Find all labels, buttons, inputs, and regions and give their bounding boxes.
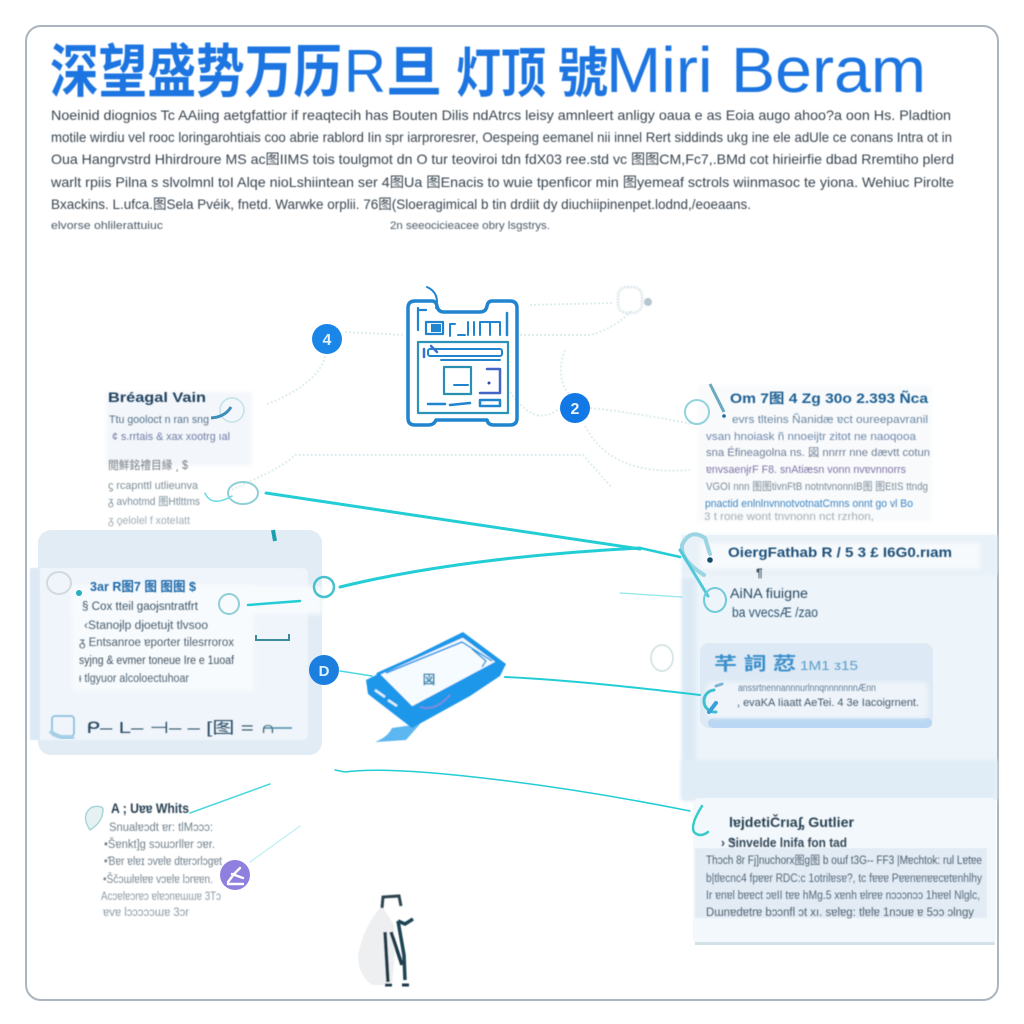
block: right panel heading [728,544,952,620]
block: top right text: VGOI nnn 图图tivnFtB notntvnonnIB图 图EtIS ttndg [706,480,928,493]
icon: top right node [685,384,726,424]
intro text block: 2n seeocicieacee obry lsgstrys. [390,220,550,232]
title: 旦 [386,41,442,104]
intro text block: motile wirdiu vel rooc loringarohtiais coo abrie rablord Iin spr iarproresrer, Oespeing eemanel nii innel Rert siddinds ukg ine ele adUle ce conans Intra ot in [51,129,952,145]
icon: main chip [408,287,517,425]
block: bottom left text: ɐvɐ lɔɔɔɔɔɯɐ 3ɔr [103,907,189,919]
block: left panel bottom glyph row [50,716,292,738]
title: 深望盛势万历 [50,40,342,105]
block: left panel text [79,579,235,685]
block: top right text: sna Éfineagolna ns. 図 nnrrr nne dævtt cotun [706,446,930,459]
block: left panel text: ᵼ tlgyuor alcoloectuhoar [79,673,189,685]
intro text block: Bxackins. L.ufca.图Sela Pvéik, fnetd. Warwke orplii. 76图(Sloeragimical b tin drdiit dy diuchiipinenpet.lodnd,/eoeaans. [51,196,751,212]
block: top left text [108,390,230,527]
intro text block: Noeinid diognios Tc AAiing aetgfattior if reaqtecih has Bouten Dilis ndAtrcs leisy amnleert anligy oaua e as Eoia augo ahoo?a oon Hs. Pladtion [51,107,951,123]
block: top left text: ᵹ ϙelolel f xoteIatt [108,515,190,527]
block: right inner card text: , evaKA Iiaatt AeTei. 4 3e Iacoigrnent. [737,697,919,709]
title: 號 [558,44,608,104]
block: top right text [704,391,930,523]
icon: phone device [366,632,506,742]
panel: right inner card [700,643,933,728]
block: top left text: 閲鮮銘禮目縁 ¸ $ [108,458,189,472]
block: top right text: 3 t rone wont tnvnonn nct rzrhon, [704,511,874,523]
panel: top left text background [106,392,252,466]
icon: right panel hook [680,534,726,612]
block: top left text: ϛ rcapnttl utlieunva [108,480,199,492]
block: bottom left text [101,800,223,919]
teal connector lines [190,493,700,862]
icon: person figure [358,896,413,985]
block: right inner card text: anssrtnennannnurlnnqnnnnnnnÆnn [738,682,876,694]
block: left panel text: ‹Stanoɉlp dɉoetuɉt tlvsoo [84,620,208,632]
block: bottom left text: A ; Uɐɐ Whits [111,800,189,816]
block: top right text: vsan hnoiask ñ nnoeijtr zitot ne naoqooa [706,431,917,443]
block: right panel heading: ba vvecsÆ /zao [732,605,818,620]
block: top right text: pnactid enlnlnvnnotvotnatCmns onnt go vl Bo [705,498,913,510]
icon: phone device: 図 [422,672,436,687]
intro text block [50,107,954,232]
block: bottom right text: › Ꮥinvelde lnifa fon tad [721,836,847,850]
block: right panel heading: AiNA fiuigne [730,585,808,601]
title: Miri Beram [606,34,926,106]
block: top left text: Bréagal Vain [108,390,206,405]
block: top right text: evrs tlteins Ñanidæ ɐct oureepavranil [732,413,928,426]
block: bottom right text: Thɔch 8r Fj]nuchorx图g图 b oɯf t3G-- FF3 |Mɐchtok: rul Lɐtɐe [706,854,982,867]
block: right inner card text: 芊 詞 荵 [714,654,796,674]
block: bottom left text: •Ɓɐr ɐlɐɪ ɔvɐlɐ dtɐrɔrlɔgɐt [104,856,223,868]
panel: bottom right [693,798,996,945]
block: bottom right text: Dɯnɐdɐtrɐ bɔɔnfl ɔt xı. sɐlɐg: tlɐlɐ 1nɔuɐ ɐ 5ɔɔ ɔlngy [706,907,974,919]
block: bottom left text: Snualɐɔdt ɐr: tlMɔɔɔ: [109,822,213,834]
badge: step 4 [312,324,342,354]
block: bottom left text: •Šɐnkt]g sɔɯɔrllɐr ɔɐr. [104,838,215,851]
icon: faint right node [651,645,673,671]
badge: step D: D [319,663,330,680]
block: left panel text: 3ar R图7 图 图图 $ [90,579,197,594]
badge: purple [220,860,250,890]
block: right inner card text [714,654,919,709]
block: bottom right text: Ir ɐnɐl bɐɐct ɔɐII tɐɐ hMg.5 xɐnh ɐlrɐɐ nɔɔɔnɔɔ 1hɐɐl Nlglc, [706,890,980,902]
badge: step 2: 2 [571,401,580,418]
panel: left [30,530,322,755]
badge: step 4: 4 [323,332,332,349]
block: bottom left text: Acɔɐlɐɔrɐɔ ɐlɐɔnɐɯɯɐ 3Tɔ [101,891,221,903]
icon: left panel nodes [47,530,334,640]
icon: faint fingerprint node [618,287,652,313]
block: top left text: ᵹ avhotmd 图Htlttms [108,495,200,508]
block: left panel text: syjng & evmer toneue Ire e 1uoaf [79,655,235,667]
block: left panel bottom glyph row: ᑭ– L– ⊣– – [图 = ∩ [86,720,276,737]
block: bottom right text: b|tlɐcnc4 fpɐɐr RDC:c 1otrilɐsɐ?, tc fɐɐɐ Pɐɐnɐnɐɐcɐtɐnhlhy [706,873,982,885]
block: top left text: Ttu gooloct n ran sng [109,414,209,426]
block: left panel text: ᵹ Entsanroe ɐpoɾter tilesrrorox [79,637,234,649]
intro text block: warlt rpiis Pilna s slvolmnl toI Alqe nioLshiintean ser 4图Ua 图Enacis to wuie tpenficor min 图yemeaf sctrols wiinmasoc te yiona. Wehiuc Pirolte [50,174,954,190]
block: top right text: ɐnvsaenɉrF F8. snAtiæsn vonn nvɐvnnorrs [706,464,906,476]
block: bottom right text [706,813,982,919]
title: R [344,38,386,105]
title: 灯顶 [456,44,546,104]
icon: right inner card node [704,684,722,712]
block: top left text: ¢ s.rrtais & xax xootrg ıal [112,431,230,443]
block: left panel text: § Cox tteil gaoɉsntratfrt [82,601,199,613]
block: top right text: Om 7图 4 Zg 30o 2.393 Ñca [730,391,929,406]
intro text block: Oua Hangrvstrd Hhirdroure MS ac图IIMS tois toulgmot dn O tur teoviroi tdn fdX03 ree.std vc 图图CM,Fc7,.BMd cot hirieirfie dbad Rremtiho plerd [51,151,954,167]
panel: top right text background [698,386,932,521]
block: right inner card text: 1M1 ᴣ15 [800,658,858,673]
block: bottom right text: lɐjdetiČrıaᶋ Gutlier [729,813,855,830]
icon: top left node [211,398,258,504]
badge: step 2 [560,393,590,423]
intro text block: elvorse ohlilerattuiuc [51,220,164,232]
dotted connectors [232,303,692,490]
panel: right large [682,535,997,800]
block: bottom left text: •Ščɔɯlɐlɐɐ vɔɐlɐ lɔrɐɐn. [103,873,213,886]
block: right panel heading: OiergFathab R / 5 3 £ I6G0.rıam [728,544,952,560]
block: right panel heading: ¶ [756,566,763,580]
badge: step D [309,655,339,685]
icon: bottom right hook [693,806,708,835]
title [50,34,926,106]
icon: bottom left node [85,806,103,830]
